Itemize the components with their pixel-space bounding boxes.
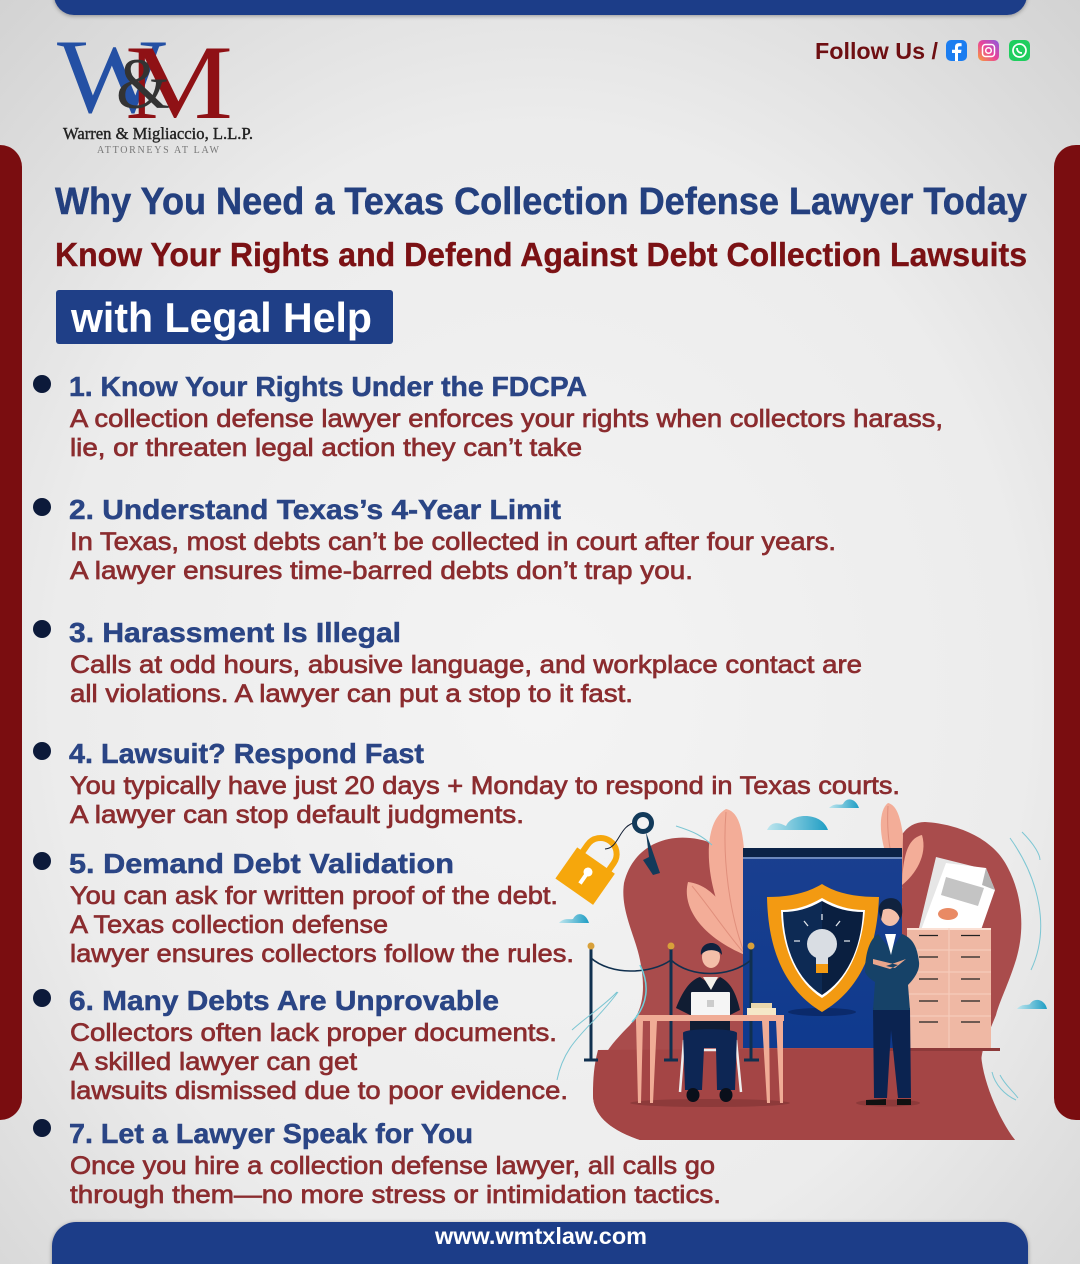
floor [593, 1048, 1015, 1140]
point 4: A lawyer can stop default judgments. [70, 801, 524, 829]
leaves [687, 803, 924, 955]
footer bar [52, 1222, 1028, 1264]
point 5: lawyer ensures collectors follow the rules. [70, 940, 574, 968]
right side bar [1054, 145, 1080, 1120]
point 1: 1. Know Your Rights Under the FDCPA [69, 371, 587, 402]
point 5: 5. Demand Debt Validation [69, 848, 454, 879]
logo [57, 18, 253, 156]
point 2 [33, 494, 836, 585]
highlighted subtitle: with Legal Help [70, 294, 372, 341]
point 1 [33, 371, 943, 462]
point 6: Collectors often lack proper documents. [70, 1019, 557, 1047]
point 6: lawsuits dismissed due to poor evidence. [70, 1077, 568, 1105]
left side bar [0, 145, 22, 1120]
background blob [593, 822, 1021, 1140]
firm tagline: ATTORNEYS AT LAW [97, 145, 220, 156]
logo M: M [125, 24, 233, 141]
icon: shield with light bulb [767, 884, 879, 1012]
icon: whatsapp [1009, 40, 1030, 61]
title: Why You Need a Texas Collection Defense Lawyer Today [55, 181, 1027, 223]
point 5: You can ask for written proof of the debt. [70, 882, 558, 910]
logo W: W [57, 18, 166, 135]
follow us [815, 38, 1030, 64]
point 1: lie, or threaten legal action they can’t take [70, 434, 582, 462]
follow us label: Follow Us / [815, 38, 939, 64]
icon: instagram [978, 40, 999, 61]
standing lawyer [856, 898, 920, 1106]
subtitle: Know Your Rights and Defend Against Debt Collection Lawsuits [55, 236, 1027, 273]
firm name: Warren & Migliaccio, L.L.P. [63, 124, 253, 143]
point 3: all violations. A lawyer can put a stop to it fast. [70, 680, 633, 708]
clouds [559, 799, 1047, 1009]
point 6 [33, 985, 568, 1105]
point 4: 4. Lawsuit? Respond Fast [69, 738, 424, 769]
point 6: 6. Many Debts Are Unprovable [69, 985, 499, 1016]
point 4 [33, 738, 900, 829]
stanchion rope barrier [584, 942, 759, 1060]
point 2: 2. Understand Texas’s 4-Year Limit [69, 494, 561, 525]
point 5 [33, 848, 574, 968]
footer bar: www.wmtxlaw.com [434, 1223, 647, 1249]
icon: padlock [555, 828, 629, 905]
point 3 [33, 617, 862, 708]
point 2: In Texas, most debts can’t be collected in court after four years. [70, 528, 836, 556]
icon: facebook [946, 40, 967, 61]
point 3: 3. Harassment Is Illegal [69, 617, 401, 648]
point 7: Once you hire a collection defense lawyer, all calls go [70, 1152, 715, 1180]
point 7: 7. Let a Lawyer Speak for You [69, 1118, 473, 1149]
illustration [555, 799, 1047, 1140]
cabinet door panel [743, 848, 902, 1048]
seated lawyer at desk [630, 943, 790, 1107]
documents [919, 857, 995, 930]
point 7 [33, 1118, 721, 1209]
icon: key [605, 814, 660, 875]
point 1: A collection defense lawyer enforces your rights when collectors harass, [70, 405, 943, 433]
point 6: A skilled lawyer can get [70, 1048, 357, 1076]
point 5: A Texas collection defense [70, 911, 388, 939]
top bar [54, 0, 1027, 15]
point 4: You typically have just 20 days + Monday to respond in Texas courts. [70, 772, 900, 800]
logo ampersand: & [116, 44, 170, 124]
point 3: Calls at odd hours, abusive language, and workplace contact are [70, 651, 862, 679]
file cabinet [880, 928, 1000, 1051]
motion lines [557, 826, 1041, 1100]
point 2: A lawyer ensures time-barred debts don’t trap you. [70, 557, 693, 585]
point 7: through them—no more stress or intimidation tactics. [70, 1181, 721, 1209]
